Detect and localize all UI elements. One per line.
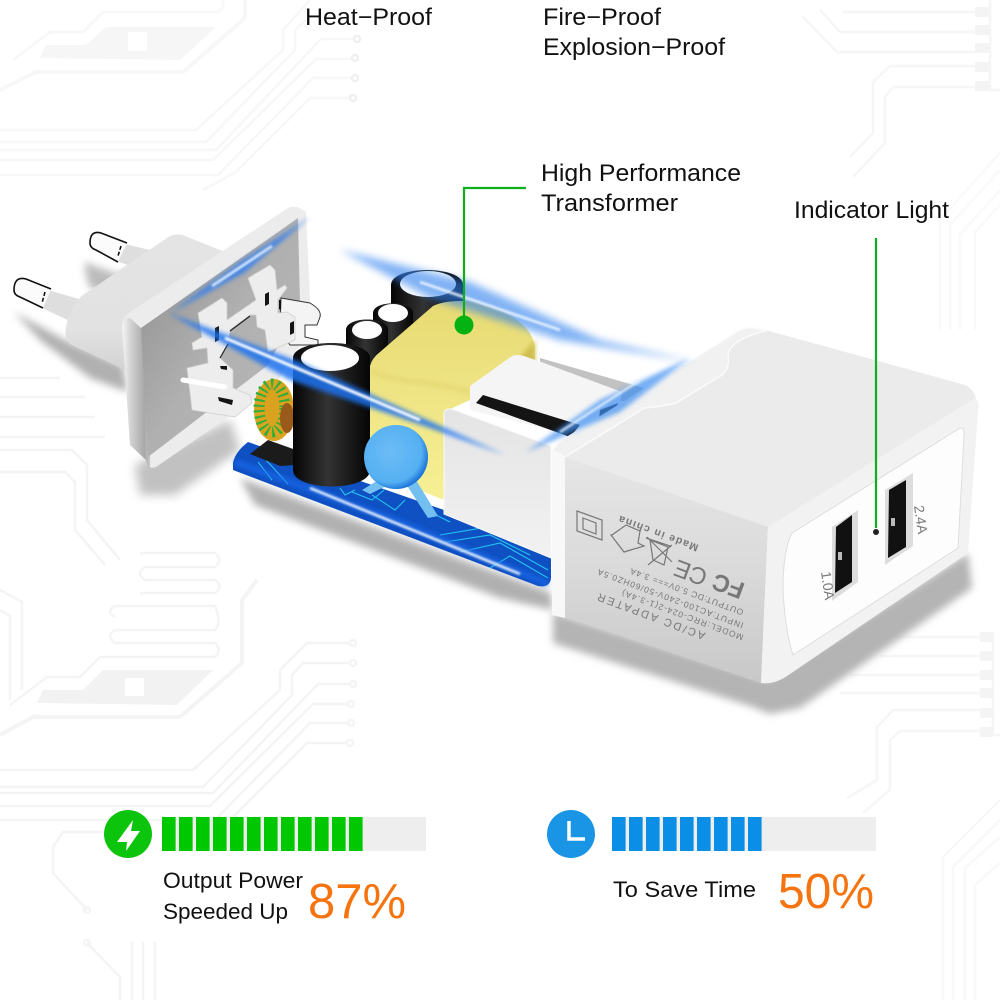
- soft drop shadows: [14, 250, 972, 714]
- prong: rear: [90, 232, 150, 270]
- capacitor: large front: [293, 343, 370, 486]
- printed label on side: OUTPUT:DC 5.0V=== 3.4A: [628, 566, 745, 617]
- USB port: 2.4A: [885, 473, 913, 565]
- background: lower-left circuit traces: [0, 378, 356, 1000]
- streak: through plate and capacitor: [168, 313, 505, 455]
- callout: transformer: Transformer: [541, 190, 678, 217]
- charger body: [552, 327, 979, 683]
- icon: lightning: [104, 810, 152, 858]
- label: output power: Speeded Up: [163, 899, 288, 924]
- background: right chip pads: [975, 7, 993, 737]
- port label: 1.0A: 1.0A: [818, 570, 838, 602]
- board traces: [258, 460, 550, 578]
- end inset panel: [783, 428, 964, 655]
- charger end face: [761, 398, 979, 683]
- value: 87%: 87%: [308, 875, 406, 929]
- streak: board edge: [235, 462, 548, 584]
- socket slot: [476, 395, 580, 437]
- progress bar: green: [162, 817, 426, 851]
- capacitor: rear large: [391, 270, 463, 340]
- background: right circuit chips and traces: [803, 0, 1000, 1000]
- printed label on side: MODEL:RRC-024-2(1-3.4A): [620, 588, 745, 642]
- streak: plate top: [170, 217, 310, 313]
- heading: fire-proof and explosion-proof: Explosion−Proof: [543, 34, 725, 61]
- transformer: [370, 301, 535, 500]
- plate clips: [183, 265, 320, 417]
- block front: [444, 409, 551, 558]
- blue disc capacitor: [362, 425, 438, 518]
- printed label on side: INPUT:AC100-240V-50/60HZ0.5A: [596, 567, 745, 630]
- streak: over socket: [526, 358, 690, 452]
- capacitor: middle: [373, 303, 413, 350]
- heading: fire-proof and explosion-proof: Fire−Proof: [543, 4, 661, 31]
- callout: transformer: [454, 160, 741, 334]
- heading: fire-proof and explosion-proof: [543, 4, 725, 61]
- socket white housing: [470, 355, 622, 445]
- capacitor: small: [346, 320, 388, 370]
- heading: heat-proof: Heat−Proof: [305, 4, 432, 31]
- plate inner face: [141, 218, 300, 457]
- value: 50%: 50%: [778, 865, 874, 919]
- plug body: [66, 234, 225, 372]
- prong: front: [14, 278, 82, 322]
- plug prongs and body: [14, 232, 225, 372]
- printed label on side: FC: [709, 567, 748, 604]
- progress bar: blue: [612, 817, 876, 851]
- label: output power: [163, 868, 303, 924]
- icon: crossed bin: [646, 537, 672, 565]
- blue light streaks: [168, 217, 695, 584]
- port label: 2.4A: 2.4A: [911, 504, 931, 536]
- collar strip: [552, 450, 565, 618]
- printed label on side: Made in china: [617, 513, 700, 553]
- streak: over transformer: [340, 250, 695, 362]
- capacitors: [346, 270, 463, 370]
- callout: indicator light: Indicator Light: [794, 197, 949, 224]
- printed label on side: [577, 511, 748, 642]
- printed label on side: CE: [670, 554, 711, 591]
- board surface: [233, 442, 551, 586]
- toroid coil: [254, 379, 294, 441]
- icon: double square: [577, 511, 602, 540]
- board connector block: [250, 440, 296, 466]
- background: lower-left circuit pad: [37, 670, 213, 705]
- plate left rim: [122, 318, 150, 468]
- socket metal tab: [540, 358, 644, 402]
- label: output power: Output Power: [163, 868, 303, 893]
- background: upper-left circuit traces: [0, 0, 360, 190]
- USB port: 1.0A: [832, 510, 858, 601]
- plate rim: [122, 207, 310, 468]
- printed label on side: AC/DC ADPATER: [596, 590, 707, 641]
- callout: transformer: High Performance: [541, 160, 741, 187]
- label: save time: To Save Time: [613, 877, 756, 902]
- charger side face: [565, 457, 768, 683]
- charger top face: [552, 327, 976, 532]
- stat: output power: [104, 810, 426, 929]
- icon: clock: [547, 810, 595, 858]
- circuit board: [233, 379, 551, 586]
- back plate: [122, 207, 310, 468]
- callout: indicator light: [794, 197, 949, 535]
- collar outline: [552, 328, 765, 457]
- background: upper-left circuit pad: [40, 27, 216, 60]
- inner block with socket: [444, 355, 644, 558]
- stat: save time: [547, 810, 876, 919]
- icon: recycle arrow: [611, 525, 644, 552]
